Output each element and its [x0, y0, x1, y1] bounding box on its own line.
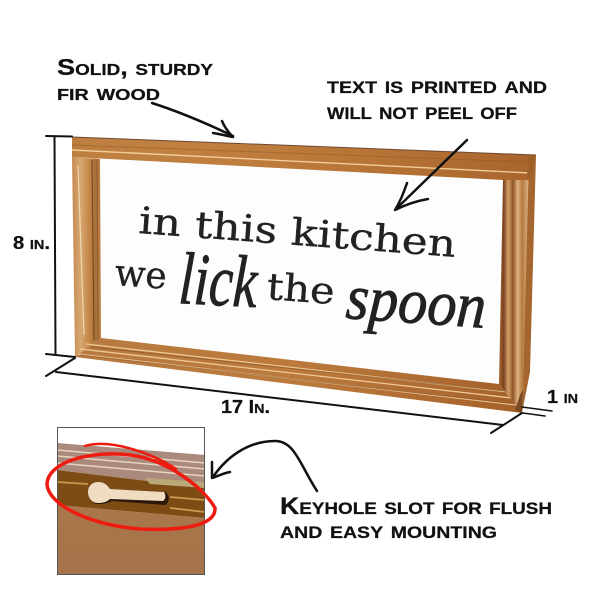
label: solid sturdy fir wood: fir wood: [57, 79, 160, 105]
label: solid sturdy fir wood: Solid, sturdy: [57, 54, 213, 80]
right rail: [499, 155, 536, 413]
label: 17 in: 17 In.: [221, 397, 270, 417]
dimension: depth: [522, 407, 552, 416]
label: solid sturdy fir wood: [57, 54, 213, 105]
white sign panel: [98, 155, 506, 386]
bottom rail: [75, 338, 522, 413]
top edge stripes: [57, 443, 205, 488]
sign text: in this kitchen: in this kitchen: [137, 199, 458, 266]
label: text is printed: [327, 72, 547, 125]
top rail: [72, 137, 536, 180]
arrow: to sign text: [395, 140, 467, 210]
inset photo: keyhole slot: [57, 427, 205, 574]
label: text is printed: will not peel off: [327, 98, 517, 125]
sign text: spoon: spoon: [344, 261, 489, 342]
slotted wood band: [57, 470, 205, 518]
wooden sign frame: [72, 137, 536, 413]
label: 8 in: 8 in.: [13, 233, 50, 253]
frame border: [58, 428, 204, 574]
red circle highlight: [47, 444, 215, 529]
left rail: [72, 157, 101, 357]
label: 1 in: 1 in: [547, 387, 578, 407]
dimension: height: [46, 136, 75, 357]
sign text: lick: lick: [177, 238, 260, 324]
cardboard back: [57, 505, 205, 574]
keyhole: [88, 482, 169, 505]
dimension: width: [46, 358, 522, 433]
sign text: the: the: [265, 265, 336, 313]
label: keyhole slot: [280, 493, 552, 544]
arrow: to inset: [212, 441, 317, 491]
sign text: we: we: [113, 251, 168, 298]
label: keyhole slot: Keyhole slot for flush: [280, 493, 552, 520]
label: text is printed: text is printed and: [327, 72, 547, 99]
label: keyhole slot: and easy mounting: [280, 517, 497, 544]
arrow: to top of frame: [152, 103, 233, 137]
